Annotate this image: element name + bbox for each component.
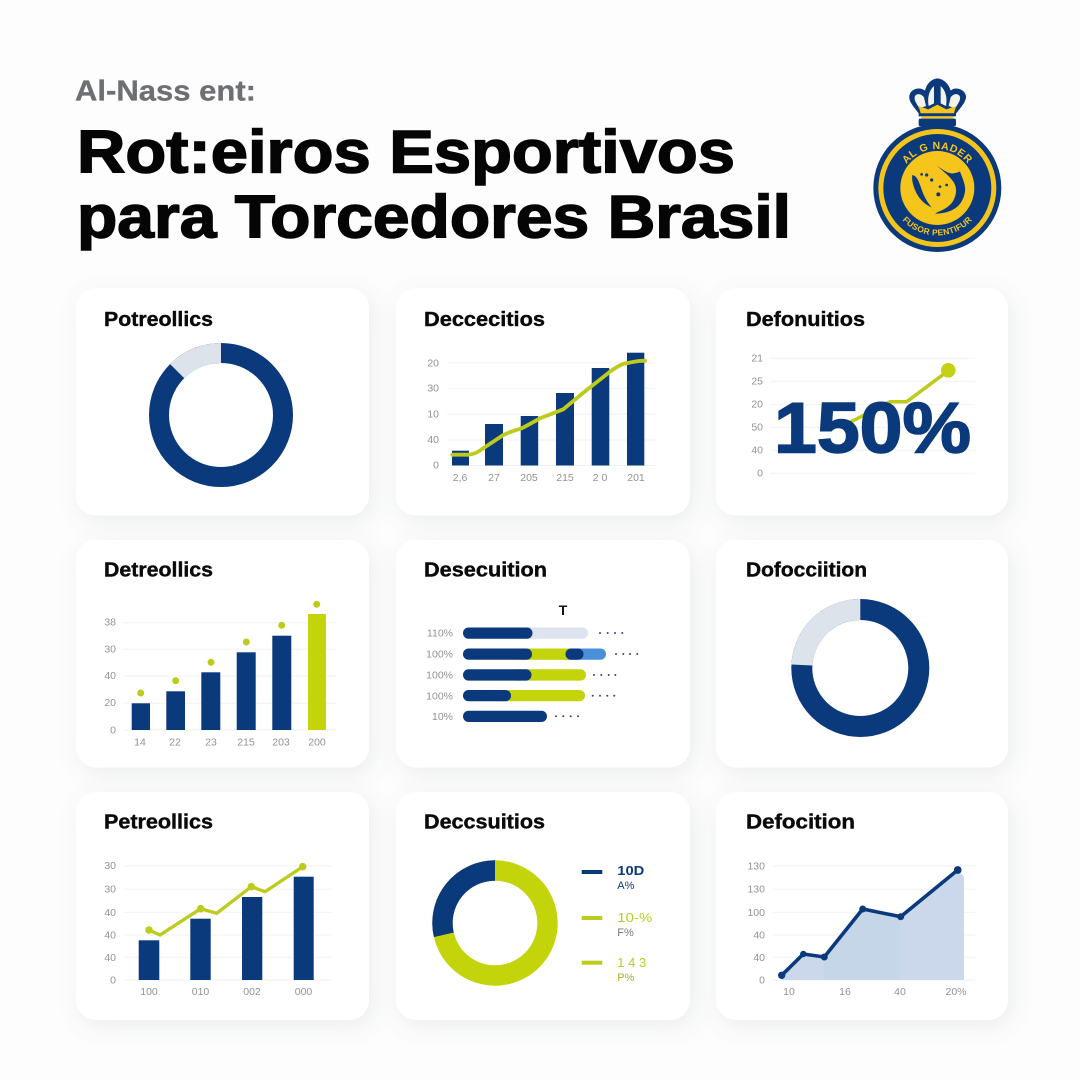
heading: Detreollics: [104, 560, 213, 582]
area line chart: 16: [839, 986, 851, 998]
line chart with big number: 50: [751, 422, 763, 434]
combo chart: 002: [243, 986, 261, 998]
legend: 10D: [617, 863, 644, 878]
panel: bars with markers: [76, 540, 369, 768]
title: Rot:eiros Esportivos: [77, 118, 735, 186]
legend: A%: [617, 880, 635, 892]
combo chart: 30: [104, 884, 116, 896]
bar chart: 23: [205, 736, 217, 748]
icon: club crest: [873, 78, 1002, 252]
line chart with big number: 40: [751, 444, 763, 456]
combo chart: 100: [140, 986, 158, 998]
combo chart: [104, 860, 332, 998]
panel: 150 percent highlight: [716, 288, 1008, 516]
legend: 10-%: [617, 910, 653, 925]
heading: Dofocciition: [746, 560, 867, 582]
area line chart: 100: [747, 907, 765, 919]
bar chart: 30: [427, 382, 439, 394]
heading: Petreollics: [104, 812, 213, 834]
legend: [582, 863, 653, 984]
panel: bars and line: [76, 792, 369, 1020]
area line chart: 130: [747, 884, 765, 896]
stacked bar chart: T: [559, 602, 568, 618]
bar chart: 0: [433, 460, 439, 472]
combo chart: 40: [104, 952, 116, 964]
panel: donut with legend: [396, 792, 690, 1020]
line chart with big number: 20: [751, 398, 763, 410]
line chart with big number: 0: [757, 468, 763, 480]
panel: bars with trend line: [396, 288, 690, 516]
combo chart: 010: [192, 986, 209, 998]
heading: Desecuition: [424, 560, 547, 582]
heading: Potreollics: [104, 309, 213, 331]
bar chart: 10: [427, 408, 439, 420]
stacked bar chart: [426, 602, 638, 723]
panel: donut overview: [76, 288, 369, 516]
legend: 1 4 3: [617, 955, 646, 970]
heading: Deccsuitios: [424, 812, 545, 834]
bar chart: 203: [272, 736, 290, 748]
line chart with big number: 21: [751, 352, 763, 364]
bar chart: 38: [104, 616, 116, 628]
stacked bar chart: 100%: [426, 648, 453, 660]
donut chart: [802, 610, 919, 726]
bar chart: 215: [237, 736, 255, 748]
bar chart: 40: [427, 434, 439, 446]
heading: Deccecitios: [424, 309, 545, 331]
bar chart: 215: [556, 472, 574, 484]
area line chart: 0: [759, 974, 765, 986]
panel: horizontal bars: [396, 540, 690, 768]
legend: P%: [617, 972, 635, 984]
bar chart: 30: [104, 644, 116, 656]
donut chart: [442, 870, 548, 976]
icon: club crest: FUSOR PENTIFUR: [902, 216, 972, 236]
area line chart: 10: [783, 986, 795, 998]
bar chart: 22: [169, 736, 181, 748]
bar chart: 20: [104, 697, 116, 709]
combo chart: 40: [104, 907, 116, 919]
bar chart: 20: [427, 358, 439, 370]
bar chart: [427, 353, 657, 484]
icon: club crest: AL G NADER: [903, 142, 972, 164]
stacked bar chart: 100%: [426, 690, 453, 702]
kicker: Al-Nass ent:: [75, 76, 256, 108]
area line chart: 20%: [945, 986, 967, 998]
bar chart: 2 0: [593, 472, 607, 484]
stacked bar chart: 10%: [432, 711, 453, 723]
bar chart: 0: [110, 724, 116, 736]
panel: area chart: [716, 792, 1008, 1020]
area line chart: [747, 860, 975, 998]
combo chart: 40: [104, 930, 116, 942]
bar chart: 200: [308, 736, 326, 748]
combo chart: 0: [110, 974, 116, 986]
bar chart: 201: [627, 472, 645, 484]
area line chart: 40: [894, 986, 906, 998]
area line chart: 130: [747, 860, 765, 872]
combo chart: 000: [295, 986, 312, 998]
combo chart: 30: [104, 860, 116, 872]
panel: large donut: [716, 540, 1008, 768]
title: para Torcedores Brasil: [77, 184, 791, 250]
heading: Defocition: [746, 812, 855, 834]
area line chart: 40: [753, 952, 765, 964]
bar chart: 27: [488, 472, 500, 484]
heading: Defonuitios: [746, 309, 865, 331]
stacked bar chart: 100%: [426, 670, 453, 682]
line chart with big number: 25: [751, 376, 763, 388]
title: [77, 118, 791, 250]
bar chart: 40: [104, 670, 116, 682]
bar chart: 14: [134, 736, 146, 748]
bar chart: [104, 601, 336, 748]
area line chart: 40: [753, 930, 765, 942]
stacked bar chart: 110%: [427, 628, 453, 640]
bar chart: 2,6: [453, 472, 467, 484]
line chart with big number: 150%: [774, 390, 971, 468]
legend: F%: [617, 927, 634, 939]
line chart with big number: [751, 352, 975, 480]
bar chart: 205: [520, 472, 538, 484]
donut chart: [159, 353, 283, 477]
